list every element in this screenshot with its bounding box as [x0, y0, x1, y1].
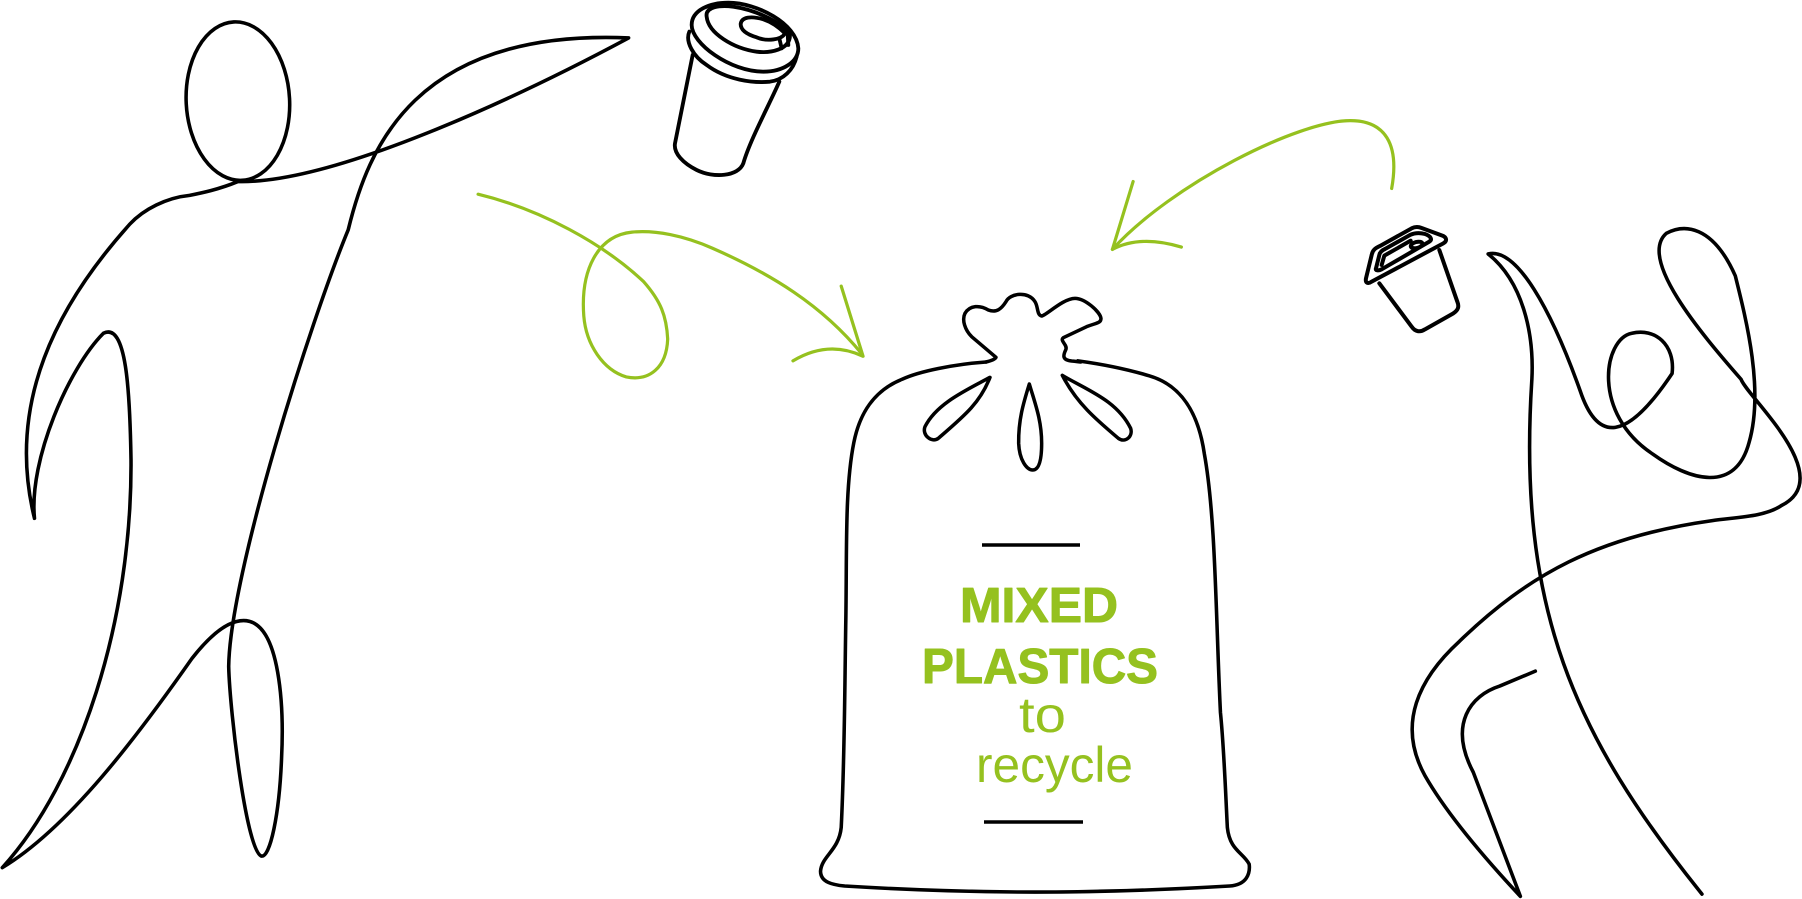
icon: takeaway cup [675, 3, 798, 175]
label: PLASTICS: PLASTICS [922, 640, 1158, 694]
arrow: from cup to bag [478, 194, 863, 378]
label: to: to [1019, 687, 1066, 743]
icon: tied plastic bag [821, 294, 1249, 892]
icon: yogurt pot [1366, 227, 1458, 331]
figure: left person throwing [2, 19, 629, 868]
label: recycle: recycle [976, 737, 1133, 793]
arrow: from pot to bag [1112, 121, 1394, 249]
figure: right person throwing [1412, 229, 1800, 896]
divider: bag label top line [982, 543, 1080, 547]
label: MIXED: MIXED [960, 579, 1118, 633]
divider: bag label bottom line [984, 820, 1083, 824]
